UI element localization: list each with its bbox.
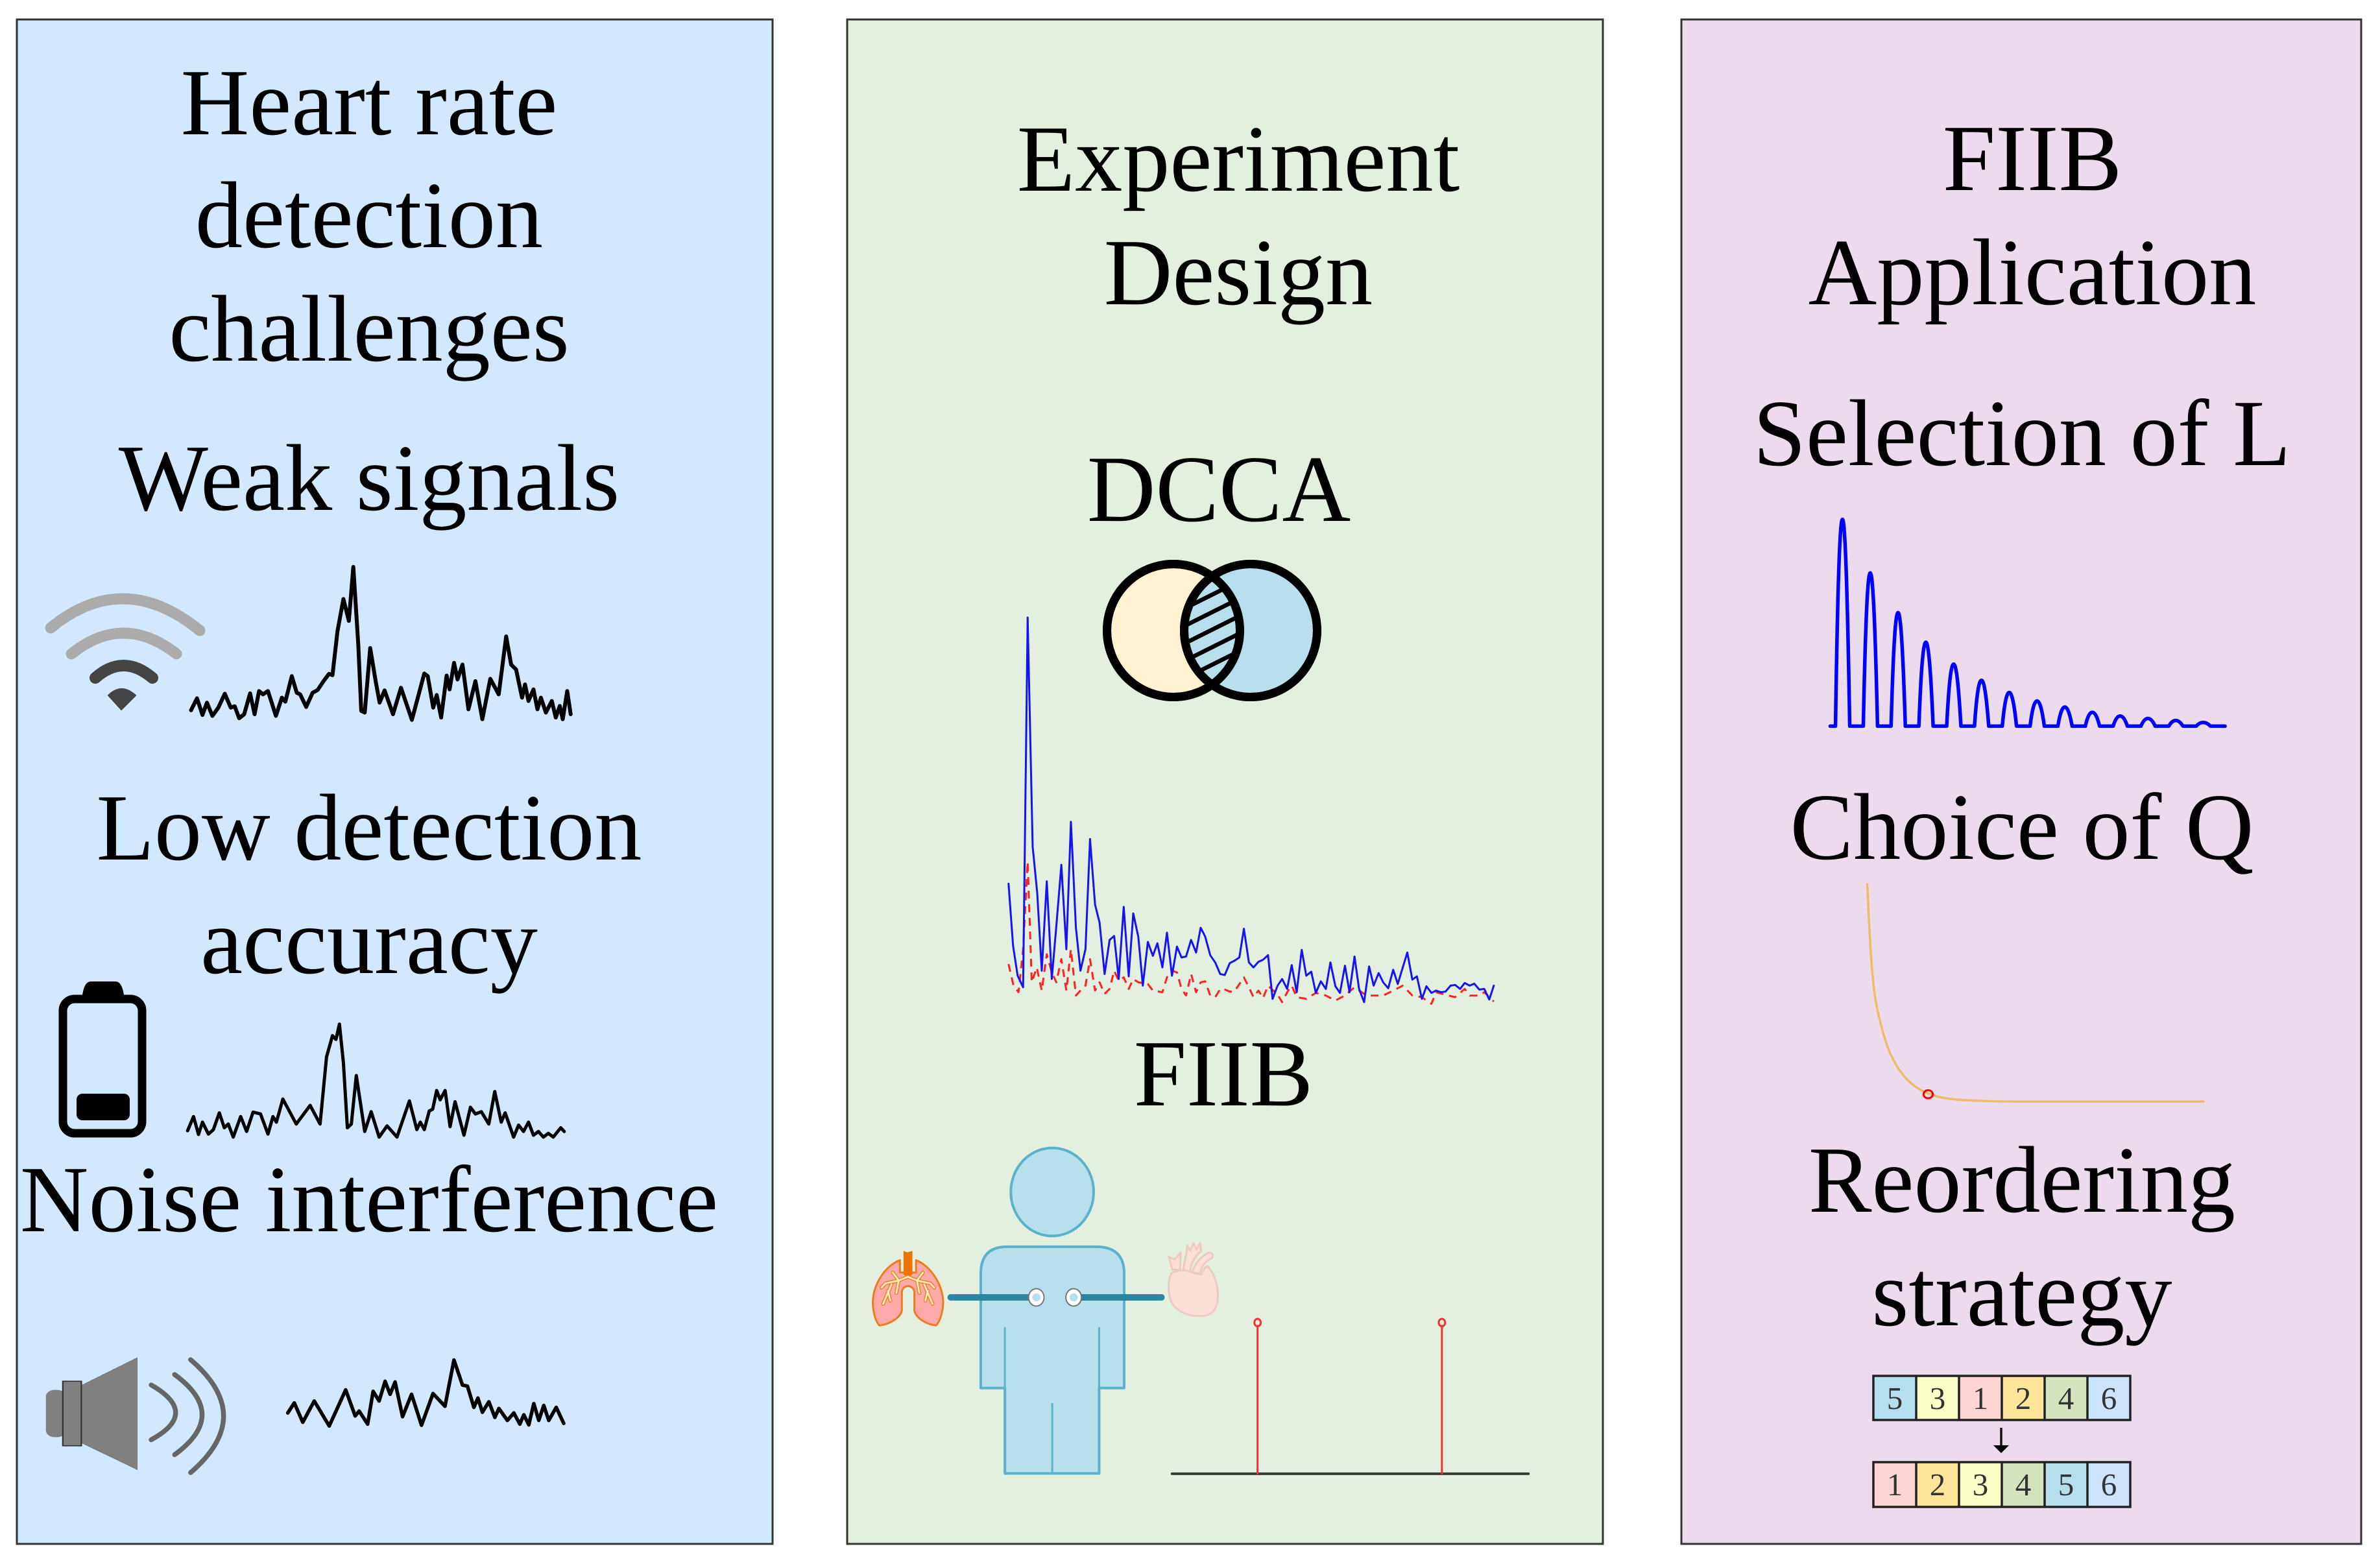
heading: reordering strategy: strategy xyxy=(1871,1241,2172,1346)
heading: reordering strategy: Reordering xyxy=(1809,1127,2235,1233)
heading: selection of L: Selection of L xyxy=(1753,381,2290,486)
heading: FIIB application xyxy=(1809,106,2256,325)
diagram: reordered sequence: 4 xyxy=(2015,1467,2031,1502)
heading: heart rate detection challenges: challenges xyxy=(169,276,570,381)
chart: choice of Q elbow curve xyxy=(1868,884,2204,1101)
panel: FIIB application xyxy=(1681,19,2361,1544)
heading: DCCA: DCCA xyxy=(1087,437,1351,542)
heading: low detection accuracy xyxy=(97,775,642,994)
panel: heart rate detection challenges xyxy=(17,19,773,1544)
chart: FIIB heartbeat impulses xyxy=(1172,1319,1528,1474)
heading: reordering strategy xyxy=(1809,1127,2235,1346)
diagram: unordered sequence: 1 xyxy=(1973,1380,1988,1416)
arrow: reorder down xyxy=(1993,1428,2009,1453)
heading: experiment design xyxy=(1017,106,1460,325)
chart: weak signal waveform xyxy=(191,567,571,720)
diagram: unordered sequence: 4 xyxy=(2058,1380,2074,1416)
panel: experiment design xyxy=(847,19,1603,1544)
diagram: reordered sequence: 1 xyxy=(1887,1467,1903,1502)
heading: experiment design: Design xyxy=(1104,220,1373,325)
icon: low battery xyxy=(63,981,142,1133)
icon: heart xyxy=(1168,1243,1218,1316)
chart: selection of L decaying peaks xyxy=(1830,520,2225,726)
heading: heart rate detection challenges: Heart rate xyxy=(181,50,557,155)
diagram: unordered sequence: 3 xyxy=(1930,1380,1945,1416)
heading: noise interference: Noise interference xyxy=(20,1147,718,1252)
heading: experiment design: Experiment xyxy=(1017,106,1460,211)
chart: DCCA spectrum xyxy=(1009,618,1494,1004)
icon: lungs xyxy=(873,1251,943,1325)
icon: venn diagram xyxy=(1103,560,1321,701)
heading: low detection accuracy: Low detection xyxy=(97,775,642,880)
diagram: reordered sequence: 5 xyxy=(2058,1467,2074,1502)
icon: wifi signal xyxy=(51,599,200,710)
chart: low accuracy waveform xyxy=(187,1024,564,1137)
icon: human figure with chest band xyxy=(951,1148,1162,1473)
diagram: reordered sequence: 6 xyxy=(2101,1467,2117,1502)
heading: choice of Q: Choice of Q xyxy=(1790,775,2254,880)
diagram: reordered sequence: 3 xyxy=(1973,1467,1988,1502)
diagram: unordered sequence xyxy=(1873,1376,2130,1420)
heading: heart rate detection challenges xyxy=(169,50,570,381)
heading: weak signals: Weak signals xyxy=(119,426,619,531)
chart: noise waveform xyxy=(288,1360,564,1426)
diagram: reordered sequence: 2 xyxy=(1930,1467,1945,1502)
heading: FIIB application: Application xyxy=(1809,220,2256,325)
diagram: unordered sequence: 2 xyxy=(2015,1380,2031,1416)
heading: low detection accuracy: accuracy xyxy=(200,889,538,994)
heading: heart rate detection challenges: detection xyxy=(195,163,543,268)
heading: FIIB application: FIIB xyxy=(1943,106,2122,211)
heading: FIIB: FIIB xyxy=(1134,1021,1313,1126)
diagram: unordered sequence: 6 xyxy=(2101,1380,2117,1416)
diagram: reordered sequence xyxy=(1873,1462,2130,1507)
icon: loudspeaker xyxy=(46,1358,224,1473)
diagram: unordered sequence: 5 xyxy=(1887,1380,1903,1416)
